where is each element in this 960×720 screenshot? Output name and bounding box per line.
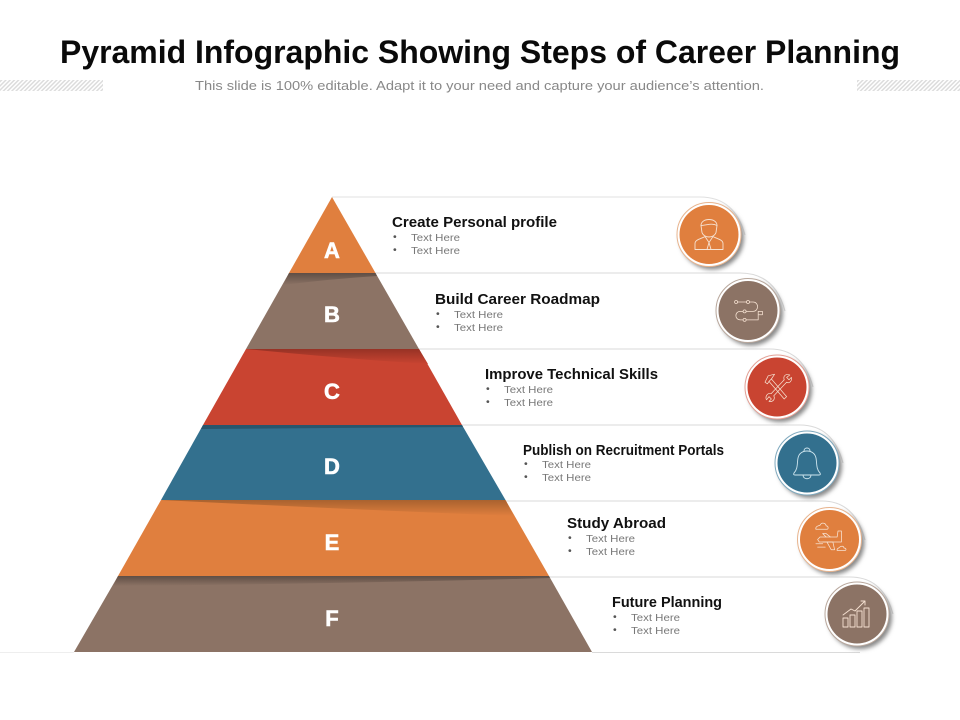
tier B: B: [324, 302, 340, 327]
step E text: Text Here: [586, 546, 635, 558]
subtitle: This slide is 100% editable. Adapt it to your need and capture your audience’s attention.: [195, 79, 764, 93]
tier C: [203, 349, 462, 425]
tier A: A: [324, 238, 340, 263]
step D text: Text Here: [542, 459, 591, 471]
tier B: [246, 273, 419, 349]
step E text: Text Here: [586, 533, 635, 545]
step A text: •: [393, 244, 397, 256]
step C text: •: [486, 396, 490, 408]
step A text: Text Here: [411, 245, 460, 257]
tier F: F: [325, 606, 339, 631]
icon: hammer and wrench: [745, 355, 812, 422]
step A text: •: [393, 231, 397, 243]
step D text: [523, 443, 724, 484]
tier C: C: [324, 379, 340, 404]
step E text: •: [568, 532, 572, 544]
step F text: •: [613, 624, 617, 636]
step E text: [567, 516, 666, 558]
step A text: Text Here: [411, 232, 460, 244]
step D text: Text Here: [542, 472, 591, 484]
step D text: •: [524, 458, 528, 470]
step C text: Text Here: [504, 384, 553, 396]
step F text: Text Here: [631, 625, 680, 637]
step B text: •: [436, 308, 440, 320]
tier D: D: [324, 454, 340, 479]
tier D: [161, 425, 506, 500]
step F text: Future Planning: [612, 595, 722, 611]
step E text: Study Abroad: [567, 516, 666, 532]
icon: person profile: [677, 202, 744, 270]
step B text: [435, 292, 600, 334]
step C text: •: [486, 383, 490, 395]
step D text: Publish on Recruitment Portals: [523, 443, 724, 459]
step B text: •: [436, 321, 440, 333]
step B text: Text Here: [454, 322, 503, 334]
icon: bell: [775, 431, 842, 498]
step D text: •: [524, 471, 528, 483]
pyramid: [74, 197, 592, 652]
tier F: [74, 576, 592, 652]
step F text: [612, 595, 722, 637]
step A text: Create Personal profile: [392, 215, 557, 231]
tier E: [118, 500, 549, 576]
step F text: •: [613, 611, 617, 623]
step C text: Text Here: [504, 397, 553, 409]
step C text: Improve Technical Skills: [485, 367, 658, 383]
step F text: Text Here: [631, 612, 680, 624]
step B text: Build Career Roadmap: [435, 292, 600, 308]
icon: airplane and clouds: [798, 508, 864, 574]
icon: growth chart: [825, 582, 892, 649]
icon: roadmap: [716, 278, 783, 346]
tier E: E: [325, 530, 339, 555]
step B text: Text Here: [454, 309, 503, 321]
tier A: [289, 197, 376, 273]
step E text: •: [568, 545, 572, 557]
title: Pyramid Infographic Showing Steps of Career Planning: [60, 34, 900, 70]
step A text: [392, 215, 557, 257]
step C text: [485, 367, 658, 409]
